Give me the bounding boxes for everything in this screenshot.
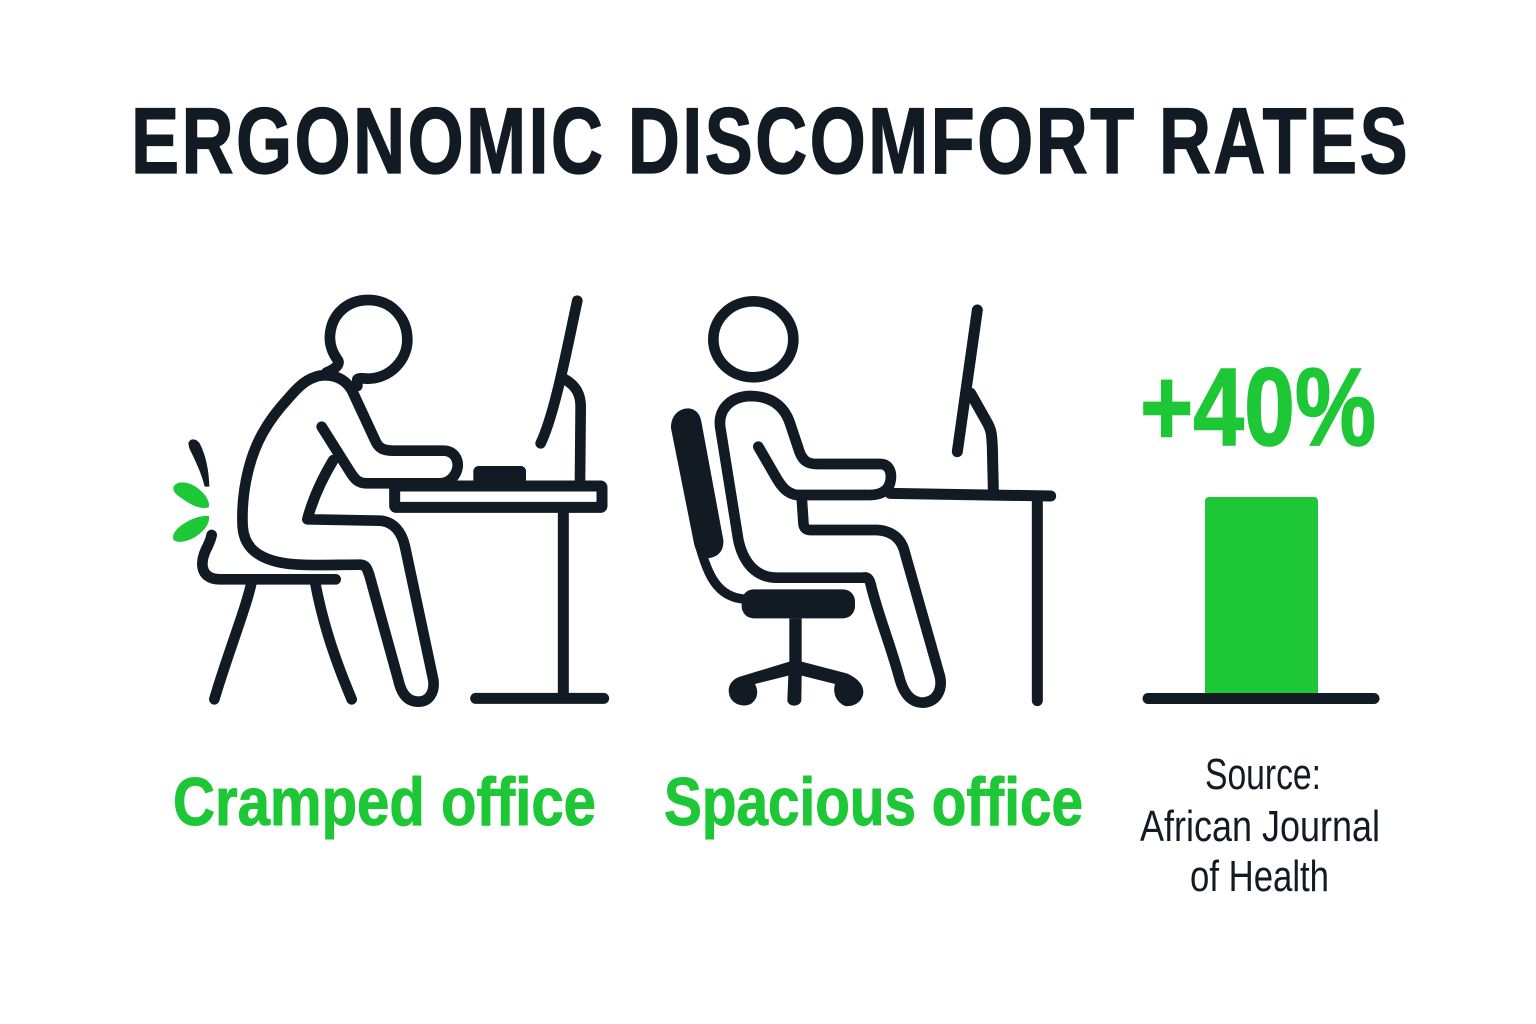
icon: hunched head <box>327 300 407 386</box>
source text <box>1140 750 1380 901</box>
icon: upright body and arm <box>720 396 891 578</box>
label: cramped office: Cramped office <box>173 764 596 840</box>
panel: spacious office illustration <box>671 301 1051 706</box>
icon: green pain mark upper <box>173 482 209 508</box>
source text: African Journal <box>1140 802 1380 851</box>
source text: Source: <box>1205 750 1321 799</box>
icon: keyboard <box>473 466 526 485</box>
source text: of Health <box>1190 852 1329 901</box>
panel: cramped office illustration <box>173 300 604 702</box>
label: spacious office: Spacious office <box>664 764 1083 840</box>
icon: desk top <box>395 486 602 507</box>
icon: monitor <box>957 310 993 490</box>
big number: +40% <box>1140 346 1376 469</box>
icon: office chair <box>671 408 863 706</box>
icon: upright leg <box>802 497 941 703</box>
icon: desk leg and base <box>476 510 604 698</box>
panel: statistic <box>1140 346 1380 901</box>
icon: pain mark <box>188 439 209 487</box>
icon: hunched body and arm <box>242 375 458 565</box>
icon: monitor <box>541 301 581 482</box>
icon: desk <box>890 493 1051 701</box>
icon: stool <box>202 535 352 699</box>
icon: hunched leg <box>307 460 434 702</box>
bar chart <box>1148 497 1374 698</box>
icon: green pain mark lower <box>173 516 209 542</box>
icon: upright head <box>713 301 793 377</box>
